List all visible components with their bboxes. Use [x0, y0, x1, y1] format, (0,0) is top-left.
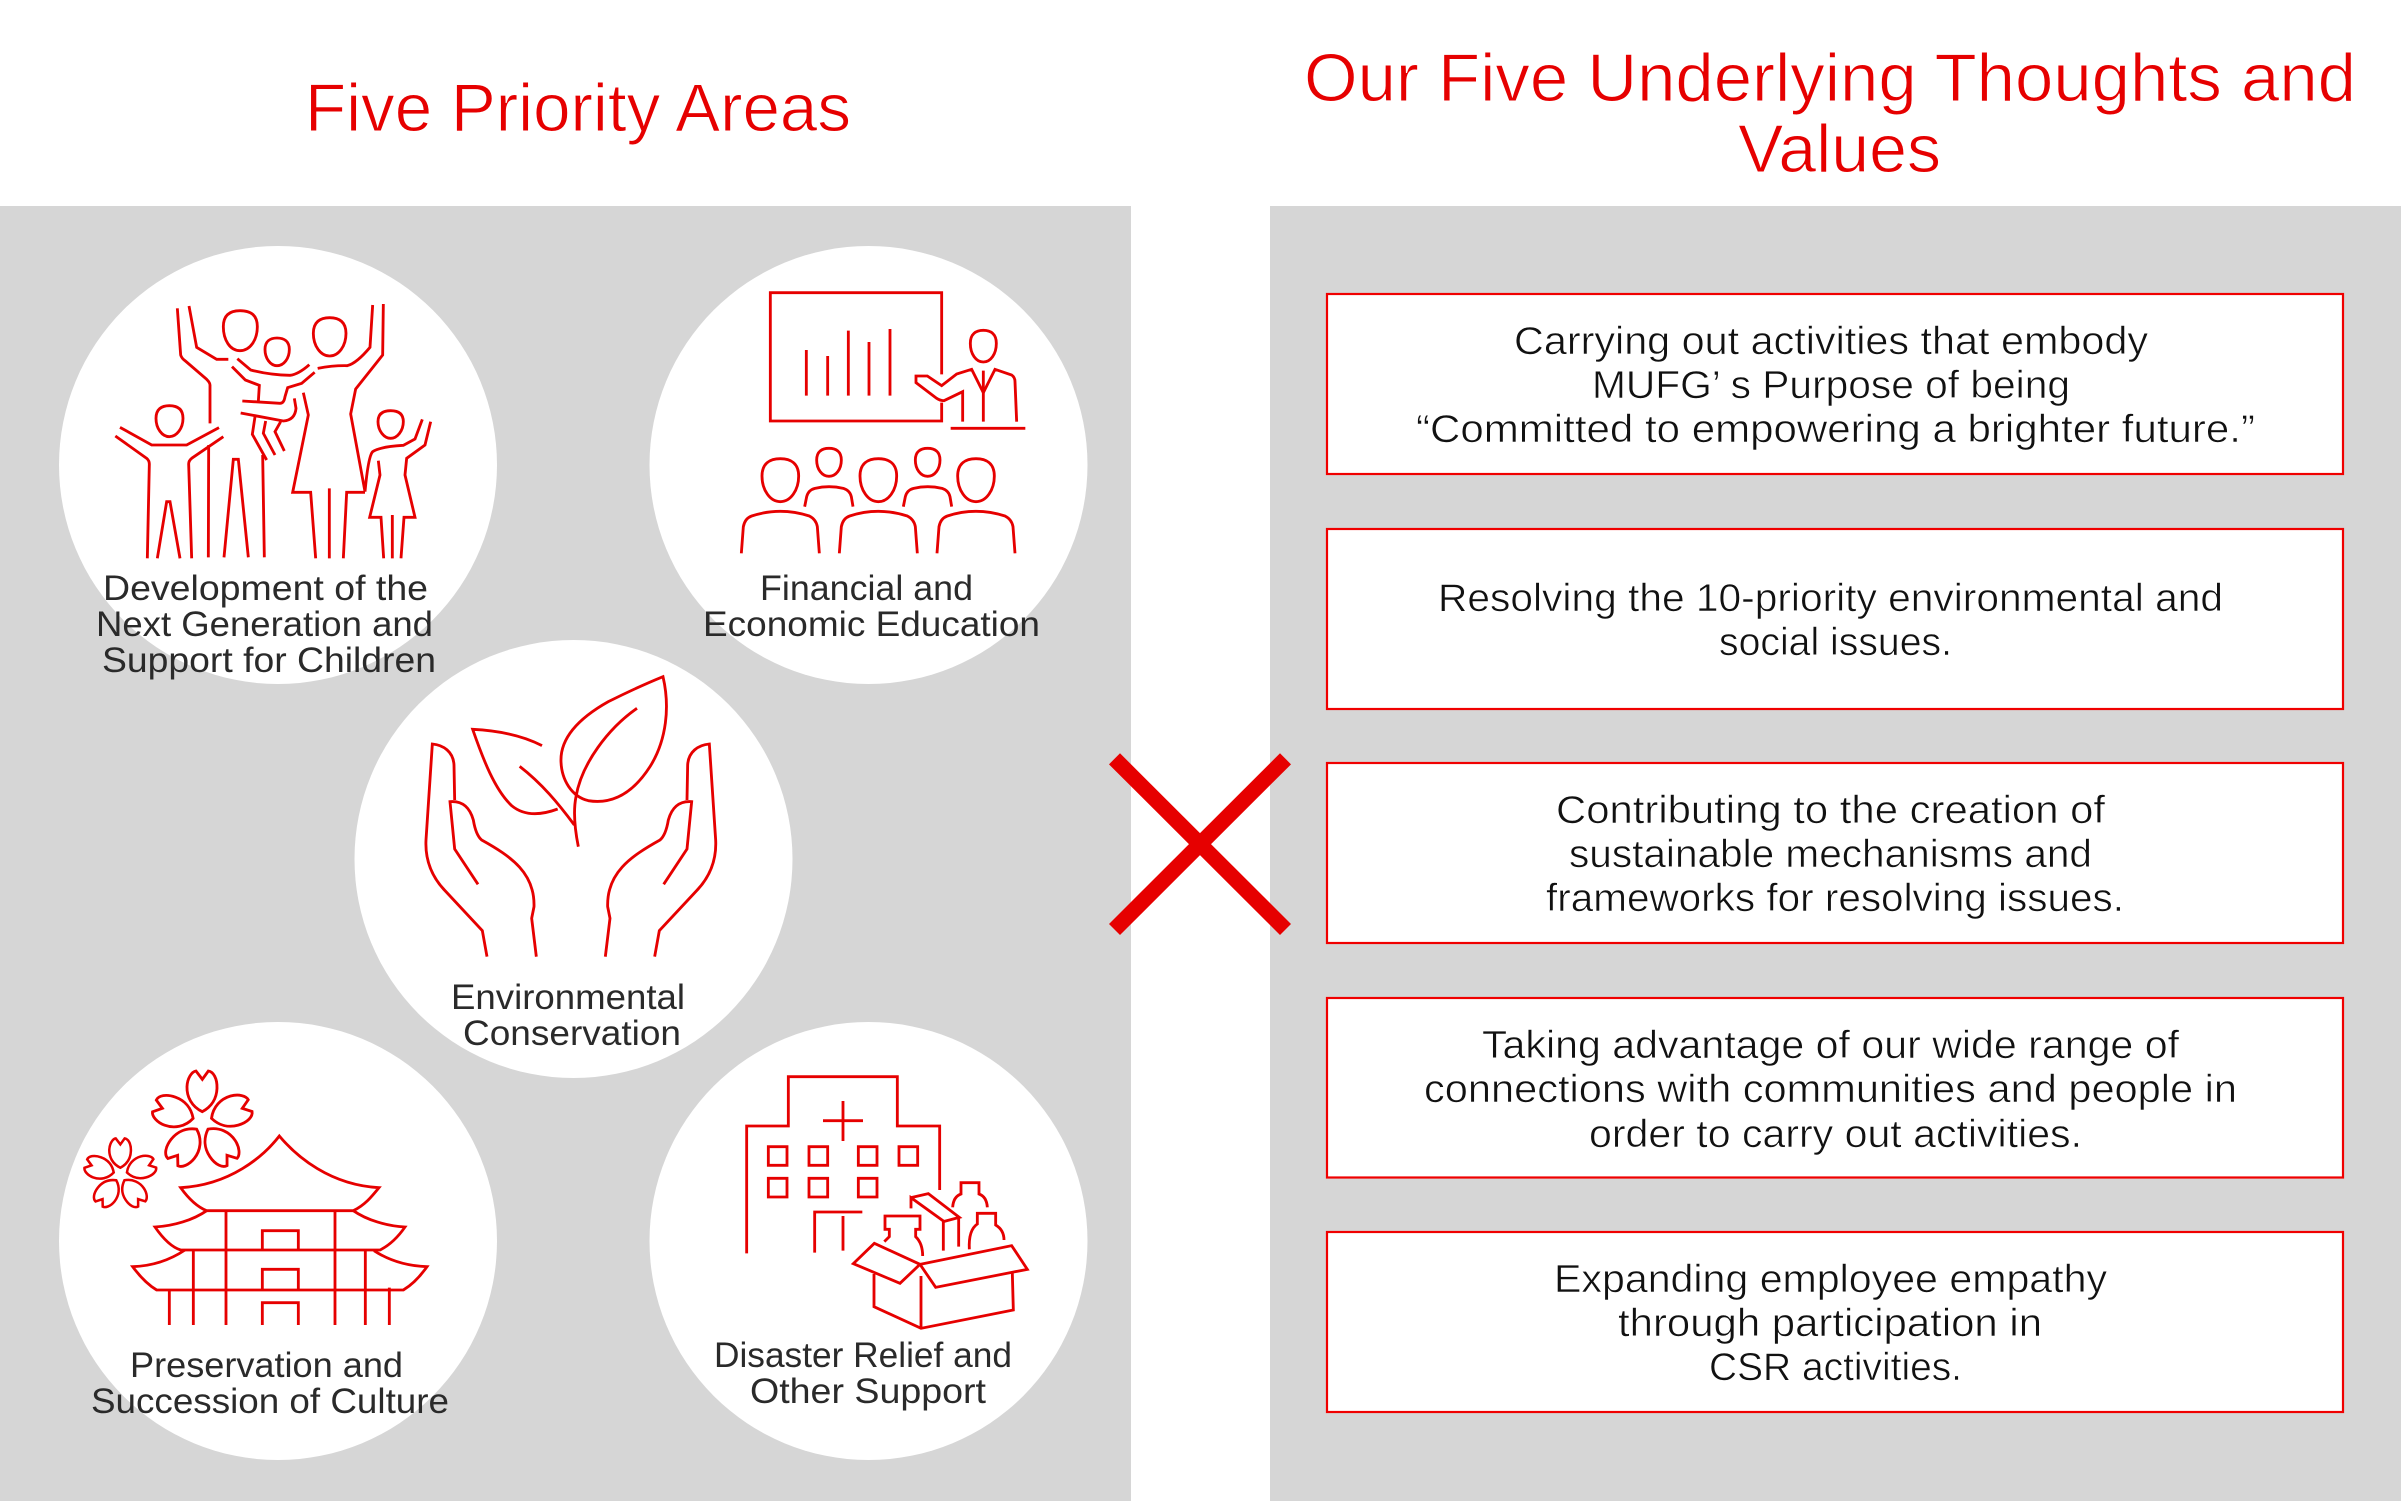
card 5: Expanding employee empathy [1554, 1258, 2108, 1301]
label: Support for Children [102, 641, 436, 680]
card 5: through participation in [1618, 1302, 2042, 1345]
card 5: CSR activities. [1709, 1346, 1962, 1389]
card 2 [1327, 529, 2343, 709]
label: Next Generation and [96, 605, 433, 644]
circle item: Disaster Relief and Other Support [650, 1022, 1088, 1460]
circle item: Preservation and Succession of Culture [59, 1022, 497, 1460]
card 4: order to carry out activities. [1589, 1113, 2082, 1156]
card 3: sustainable mechanisms and [1569, 833, 2092, 876]
card 5 [1327, 1232, 2343, 1412]
label: Succession of Culture [91, 1382, 449, 1421]
title: Our Five Underlying Thoughts and Values: Our Five Underlying Thoughts and [1304, 40, 2356, 116]
card 1: “Committed to empowering a brighter future.” [1416, 408, 2255, 451]
card 4 [1327, 998, 2343, 1178]
title: Five Priority Areas: Five Priority Areas [305, 70, 851, 146]
card 1: MUFG’ s Purpose of being [1592, 364, 2070, 407]
label: Conservation [463, 1014, 681, 1053]
card 3: frameworks for resolving issues. [1546, 877, 2124, 920]
panel: five underlying thoughts and values [1270, 206, 2401, 1501]
card 3 [1327, 763, 2343, 943]
label [451, 978, 685, 1053]
label: Development of the [103, 569, 428, 608]
card 4: connections with communities and people in [1424, 1068, 2237, 1111]
label [91, 1346, 449, 1421]
label [703, 569, 1040, 644]
card 1: Carrying out activities that embody [1514, 320, 2149, 363]
label: Other Support [750, 1372, 986, 1411]
label: Preservation and [130, 1346, 403, 1385]
circle item: Environmental Conservation [354, 640, 792, 1078]
icon: hospital and relief box [747, 1077, 1027, 1328]
panel: five priority areas [0, 206, 1131, 1501]
label [96, 569, 436, 680]
icon: temple and cherry blossoms [82, 1071, 427, 1325]
circle item: Development of the Next Generation and Support for Children [59, 246, 497, 684]
icon: presenter and audience [741, 293, 1025, 553]
label: Environmental [451, 978, 685, 1017]
circle item: Financial and Economic Education [650, 246, 1088, 684]
card 1 [1327, 294, 2343, 474]
title: Our Five Underlying Thoughts and Values: Values [1738, 111, 1941, 187]
label: Financial and [760, 569, 973, 608]
label [714, 1336, 1012, 1411]
label: Disaster Relief and [714, 1336, 1012, 1375]
card 2: Resolving the 10-priority environmental and [1438, 577, 2223, 620]
icon: hands holding leaves [426, 677, 716, 957]
card 3: Contributing to the creation of [1556, 789, 2105, 832]
card 4: Taking advantage of our wide range of [1482, 1024, 2179, 1067]
icon: multiplication cross [1114, 759, 1286, 930]
card 2: social issues. [1719, 621, 1952, 664]
icon: family with raised arms [115, 304, 431, 558]
label: Economic Education [703, 605, 1040, 644]
title: Our Five Underlying Thoughts and Values [1304, 40, 2356, 187]
